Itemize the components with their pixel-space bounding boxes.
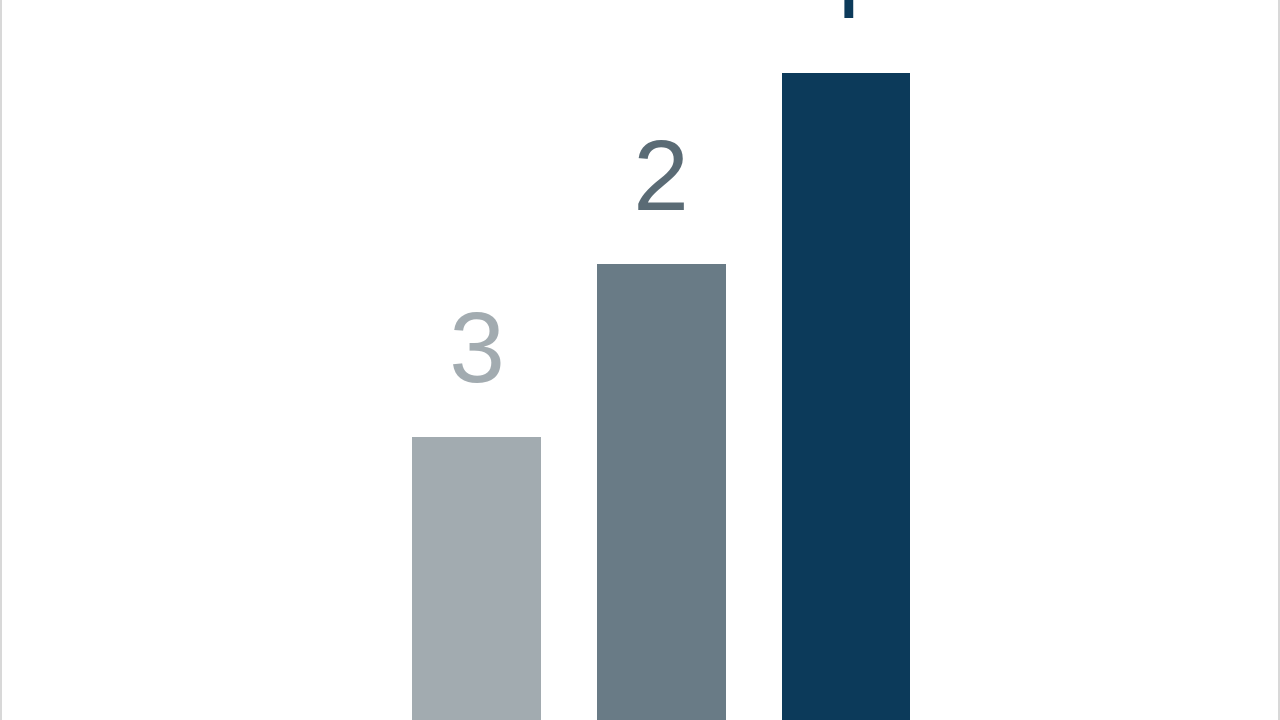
bar: rank 3 (412, 292, 541, 720)
label: 3: 3 (449, 292, 505, 404)
label: 2: 2 (633, 120, 689, 232)
bar: rank 1 (782, 0, 910, 720)
bar: rank 2 (597, 120, 726, 720)
